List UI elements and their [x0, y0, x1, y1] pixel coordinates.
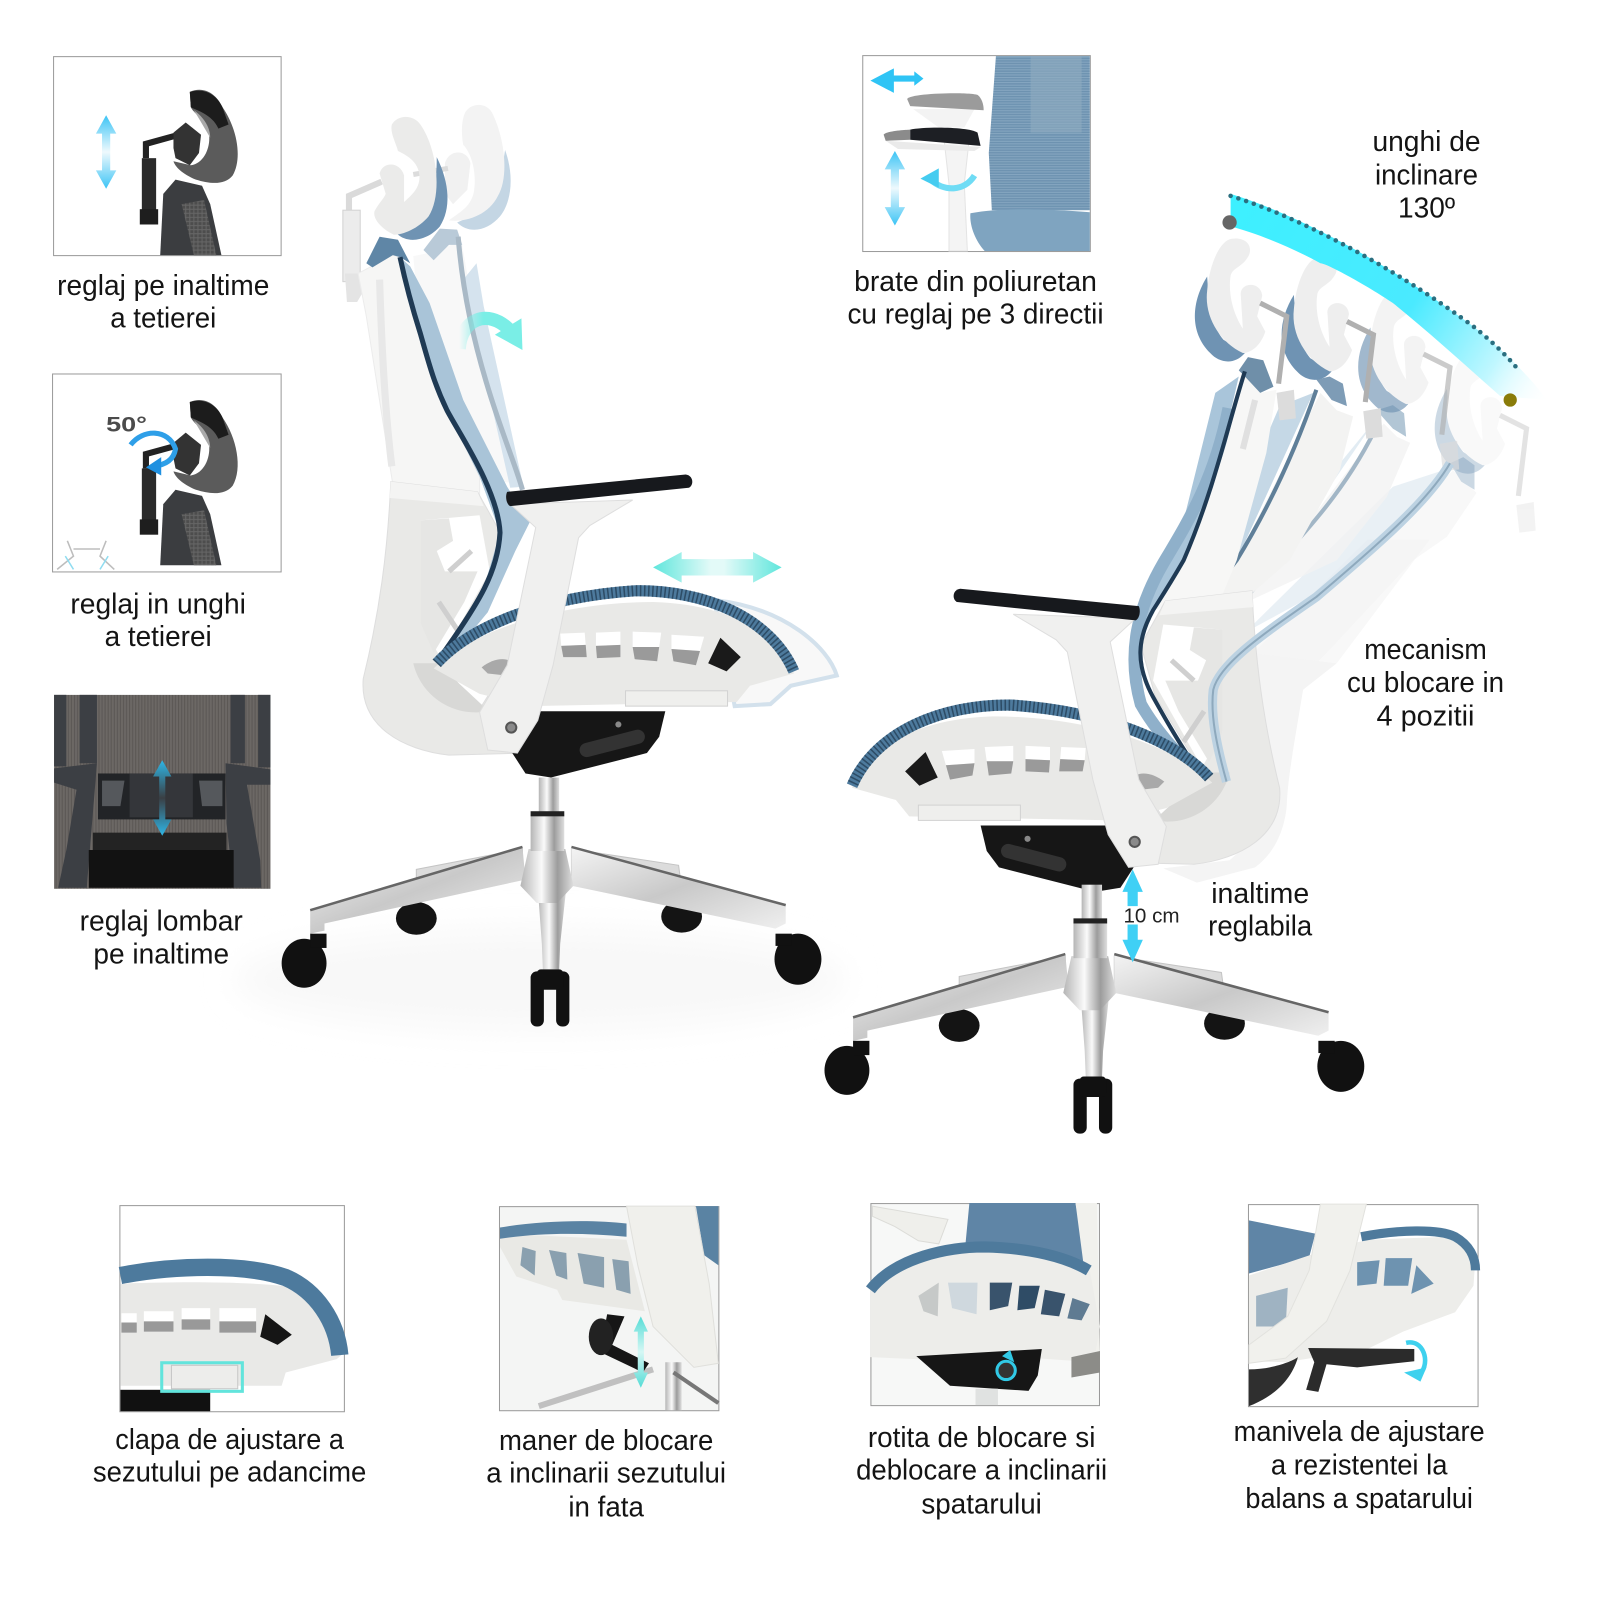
panel: armrest [863, 56, 1090, 252]
caption: recline lock wheel: rotita de blocare si [868, 1422, 1095, 1454]
caption: seat depth flap: clapa de ajustare a [115, 1424, 344, 1456]
caption: tension crank: a rezistentei la [1271, 1449, 1448, 1481]
caption: recline lock wheel: spatarului [921, 1488, 1042, 1520]
column [539, 778, 559, 814]
caption: tilt angle: unghi de [1372, 126, 1481, 158]
base chrome [539, 1362, 718, 1410]
column [976, 1389, 998, 1405]
seat windows [482, 632, 741, 676]
icon: vertical arrow [96, 115, 116, 189]
caption: locking mechanism: cu blocare in [1347, 667, 1504, 699]
armrest pad [506, 474, 692, 506]
flap [171, 1365, 238, 1389]
icon: vertical arrow [885, 151, 905, 226]
right chair mesh spine [1135, 371, 1245, 781]
lumbar side frames [54, 695, 270, 888]
caption: headrest angle: reglaj in unghi [70, 588, 246, 620]
arc start marker [1222, 215, 1237, 230]
crank lever [1306, 1348, 1414, 1392]
panel: lumbar [54, 695, 270, 889]
headrest copy [140, 400, 238, 565]
neck diagram [57, 541, 114, 569]
caption: forward seat tilt handle: in fata [568, 1491, 644, 1523]
ghost back 4 [1230, 457, 1477, 714]
caption: lumbar [80, 906, 243, 970]
panel: seat depth flap [120, 1206, 344, 1412]
upper arm support [913, 109, 974, 128]
panel: tension crank [1248, 1204, 1478, 1407]
tilt angle arc [1222, 194, 1547, 407]
arm bolt [506, 722, 516, 733]
arm stem [627, 1206, 718, 1367]
grey block [1071, 1351, 1100, 1378]
caption: seat depth flap [93, 1424, 366, 1489]
caption: forward seat tilt handle: maner de blocare [499, 1425, 713, 1457]
column sleeve [531, 814, 564, 851]
panel: headrest angle [53, 374, 281, 572]
headrest and bracket [140, 90, 238, 255]
arm stem [480, 500, 633, 753]
seat pan [500, 1234, 645, 1311]
seat mesh [120, 1267, 340, 1355]
panel: forward seat tilt handle [499, 1206, 719, 1411]
icon: tilt arrow [634, 1316, 648, 1388]
seat pan [1249, 1237, 1476, 1362]
icon: rotation arrow [131, 433, 176, 476]
caption: locking mechanism: mecanism [1364, 634, 1487, 666]
black handle [589, 1314, 649, 1372]
left chair ghost seat front [714, 600, 837, 706]
left chair seat and armrest [434, 474, 794, 778]
wheels [282, 934, 821, 1027]
icon: rotate arrow [920, 168, 974, 188]
panel: headrest height [54, 57, 281, 256]
front base arm [538, 888, 566, 969]
caption: tilt angle: 130º [1398, 192, 1456, 224]
caption: tension crank: balans a spatarului [1245, 1483, 1473, 1515]
floor shadow under left chair [235, 929, 847, 1031]
lumbar lower seat [89, 833, 234, 888]
arm post [944, 138, 969, 251]
mechanism [120, 1390, 210, 1411]
rear flanges [416, 849, 682, 890]
caption: tilt angle: inclinare [1375, 160, 1478, 192]
headrest 1 [1195, 238, 1296, 420]
ghost sweep behind backs [1253, 540, 1430, 663]
ghost back 4 stripe [1212, 463, 1450, 782]
arc end marker [1504, 393, 1517, 407]
arm post [1071, 1203, 1100, 1357]
seat mesh [500, 1221, 627, 1239]
windows [520, 1247, 631, 1294]
headrest 2 [1282, 257, 1383, 439]
left chair headrest [374, 117, 448, 240]
seat pan [434, 602, 794, 706]
caption: recline lock wheel: deblocare a inclinarii [856, 1455, 1107, 1487]
seat [970, 209, 1090, 251]
caption: armrest [847, 266, 1104, 330]
caption: headrest height: reglaj pe inaltime [57, 270, 269, 302]
right chair seat and armrest [852, 589, 1212, 892]
icon: lumbar arrow [153, 760, 171, 836]
right chair lower shell [1092, 591, 1280, 864]
right chair base and wheels [824, 885, 1364, 1134]
icon: circular arrow [1404, 1342, 1427, 1382]
seat pan [120, 1282, 344, 1386]
seat mesh [1249, 1220, 1315, 1273]
caption: forward seat tilt handle: a inclinarii sezutului [486, 1458, 726, 1490]
ghost back 2 [1204, 377, 1353, 633]
seat pan [870, 1250, 1100, 1362]
rear wheels [396, 900, 702, 935]
arm [872, 1206, 948, 1244]
label 50 degrees: 50° [106, 413, 147, 437]
caption: armrest: cu reglaj pe 3 directii [847, 298, 1104, 330]
left chair headrest bracket [343, 182, 382, 302]
base and wheels [282, 778, 821, 1027]
seat mesh edge [1361, 1231, 1476, 1270]
right chair [824, 238, 1536, 1134]
left chair ghost backrest [413, 229, 523, 490]
caption: tilt angle [1372, 126, 1481, 224]
lower pad [884, 130, 910, 141]
caption: adjustable height: inaltime [1211, 878, 1309, 910]
left chair mesh spine [400, 257, 530, 655]
hub [520, 849, 573, 903]
height arrows [1122, 869, 1143, 962]
caption: adjustable height: reglabila [1208, 911, 1312, 943]
ghost back 3 [1214, 405, 1410, 633]
right base arm [571, 847, 786, 929]
seat mesh [870, 1247, 1089, 1290]
highlight box [162, 1363, 242, 1391]
arm stem [1249, 1204, 1366, 1363]
right chair back frame [1134, 357, 1277, 640]
windows [121, 1308, 292, 1345]
caption: seat depth flap: sezutului pe adancime [93, 1457, 366, 1489]
label: 10 cm: 10 cm [1123, 905, 1180, 927]
caption: headrest height [57, 270, 269, 335]
windows [918, 1283, 1090, 1320]
black mechanism [512, 711, 665, 778]
caption: locking mechanism: 4 pozitii [1377, 701, 1474, 733]
caption: lumbar: reglaj lombar [80, 906, 243, 938]
dark base [1249, 1357, 1298, 1406]
caption: headrest angle: a tetierei [105, 621, 212, 653]
icon: lock wheel arrow [997, 1350, 1015, 1380]
headrest 3 faded [1358, 289, 1459, 471]
mesh back [965, 1203, 1087, 1266]
caption: lumbar: pe inaltime [93, 938, 229, 970]
left chair ghost headrest [413, 105, 511, 230]
upper ghost pad [907, 93, 984, 110]
caption: headrest angle [70, 588, 246, 653]
icon: curved backrest arrow [459, 318, 522, 350]
lumbar support [98, 773, 226, 819]
headrest 4 faded [1435, 351, 1536, 533]
caption: armrest: brate din poliuretan [854, 266, 1097, 298]
lower pad underside [886, 141, 981, 151]
seat depth tab [626, 691, 728, 706]
left chair lower shell [363, 482, 551, 755]
windows [1256, 1258, 1434, 1327]
caption: locking mechanism [1347, 634, 1504, 733]
left chair back frame [358, 237, 480, 500]
caption: forward seat tilt handle [486, 1425, 726, 1523]
icon: seat depth double arrow [653, 552, 782, 583]
seat mesh edge [437, 591, 794, 671]
caption: tension crank: manivela de ajustare [1234, 1416, 1485, 1448]
black mechanism [916, 1349, 1042, 1391]
caption: adjustable height [1208, 878, 1312, 943]
left base arm [310, 847, 526, 934]
right chair ghost lower shell [1163, 653, 1337, 883]
caption: recline lock wheel [856, 1422, 1107, 1520]
left chair [282, 105, 837, 1027]
caption: headrest height: a tetierei [110, 303, 216, 335]
mesh backrest [989, 56, 1090, 210]
icon: horizontal arrow [870, 68, 923, 93]
panel: recline lock wheel [870, 1203, 1100, 1406]
caption: tension crank [1234, 1416, 1485, 1515]
